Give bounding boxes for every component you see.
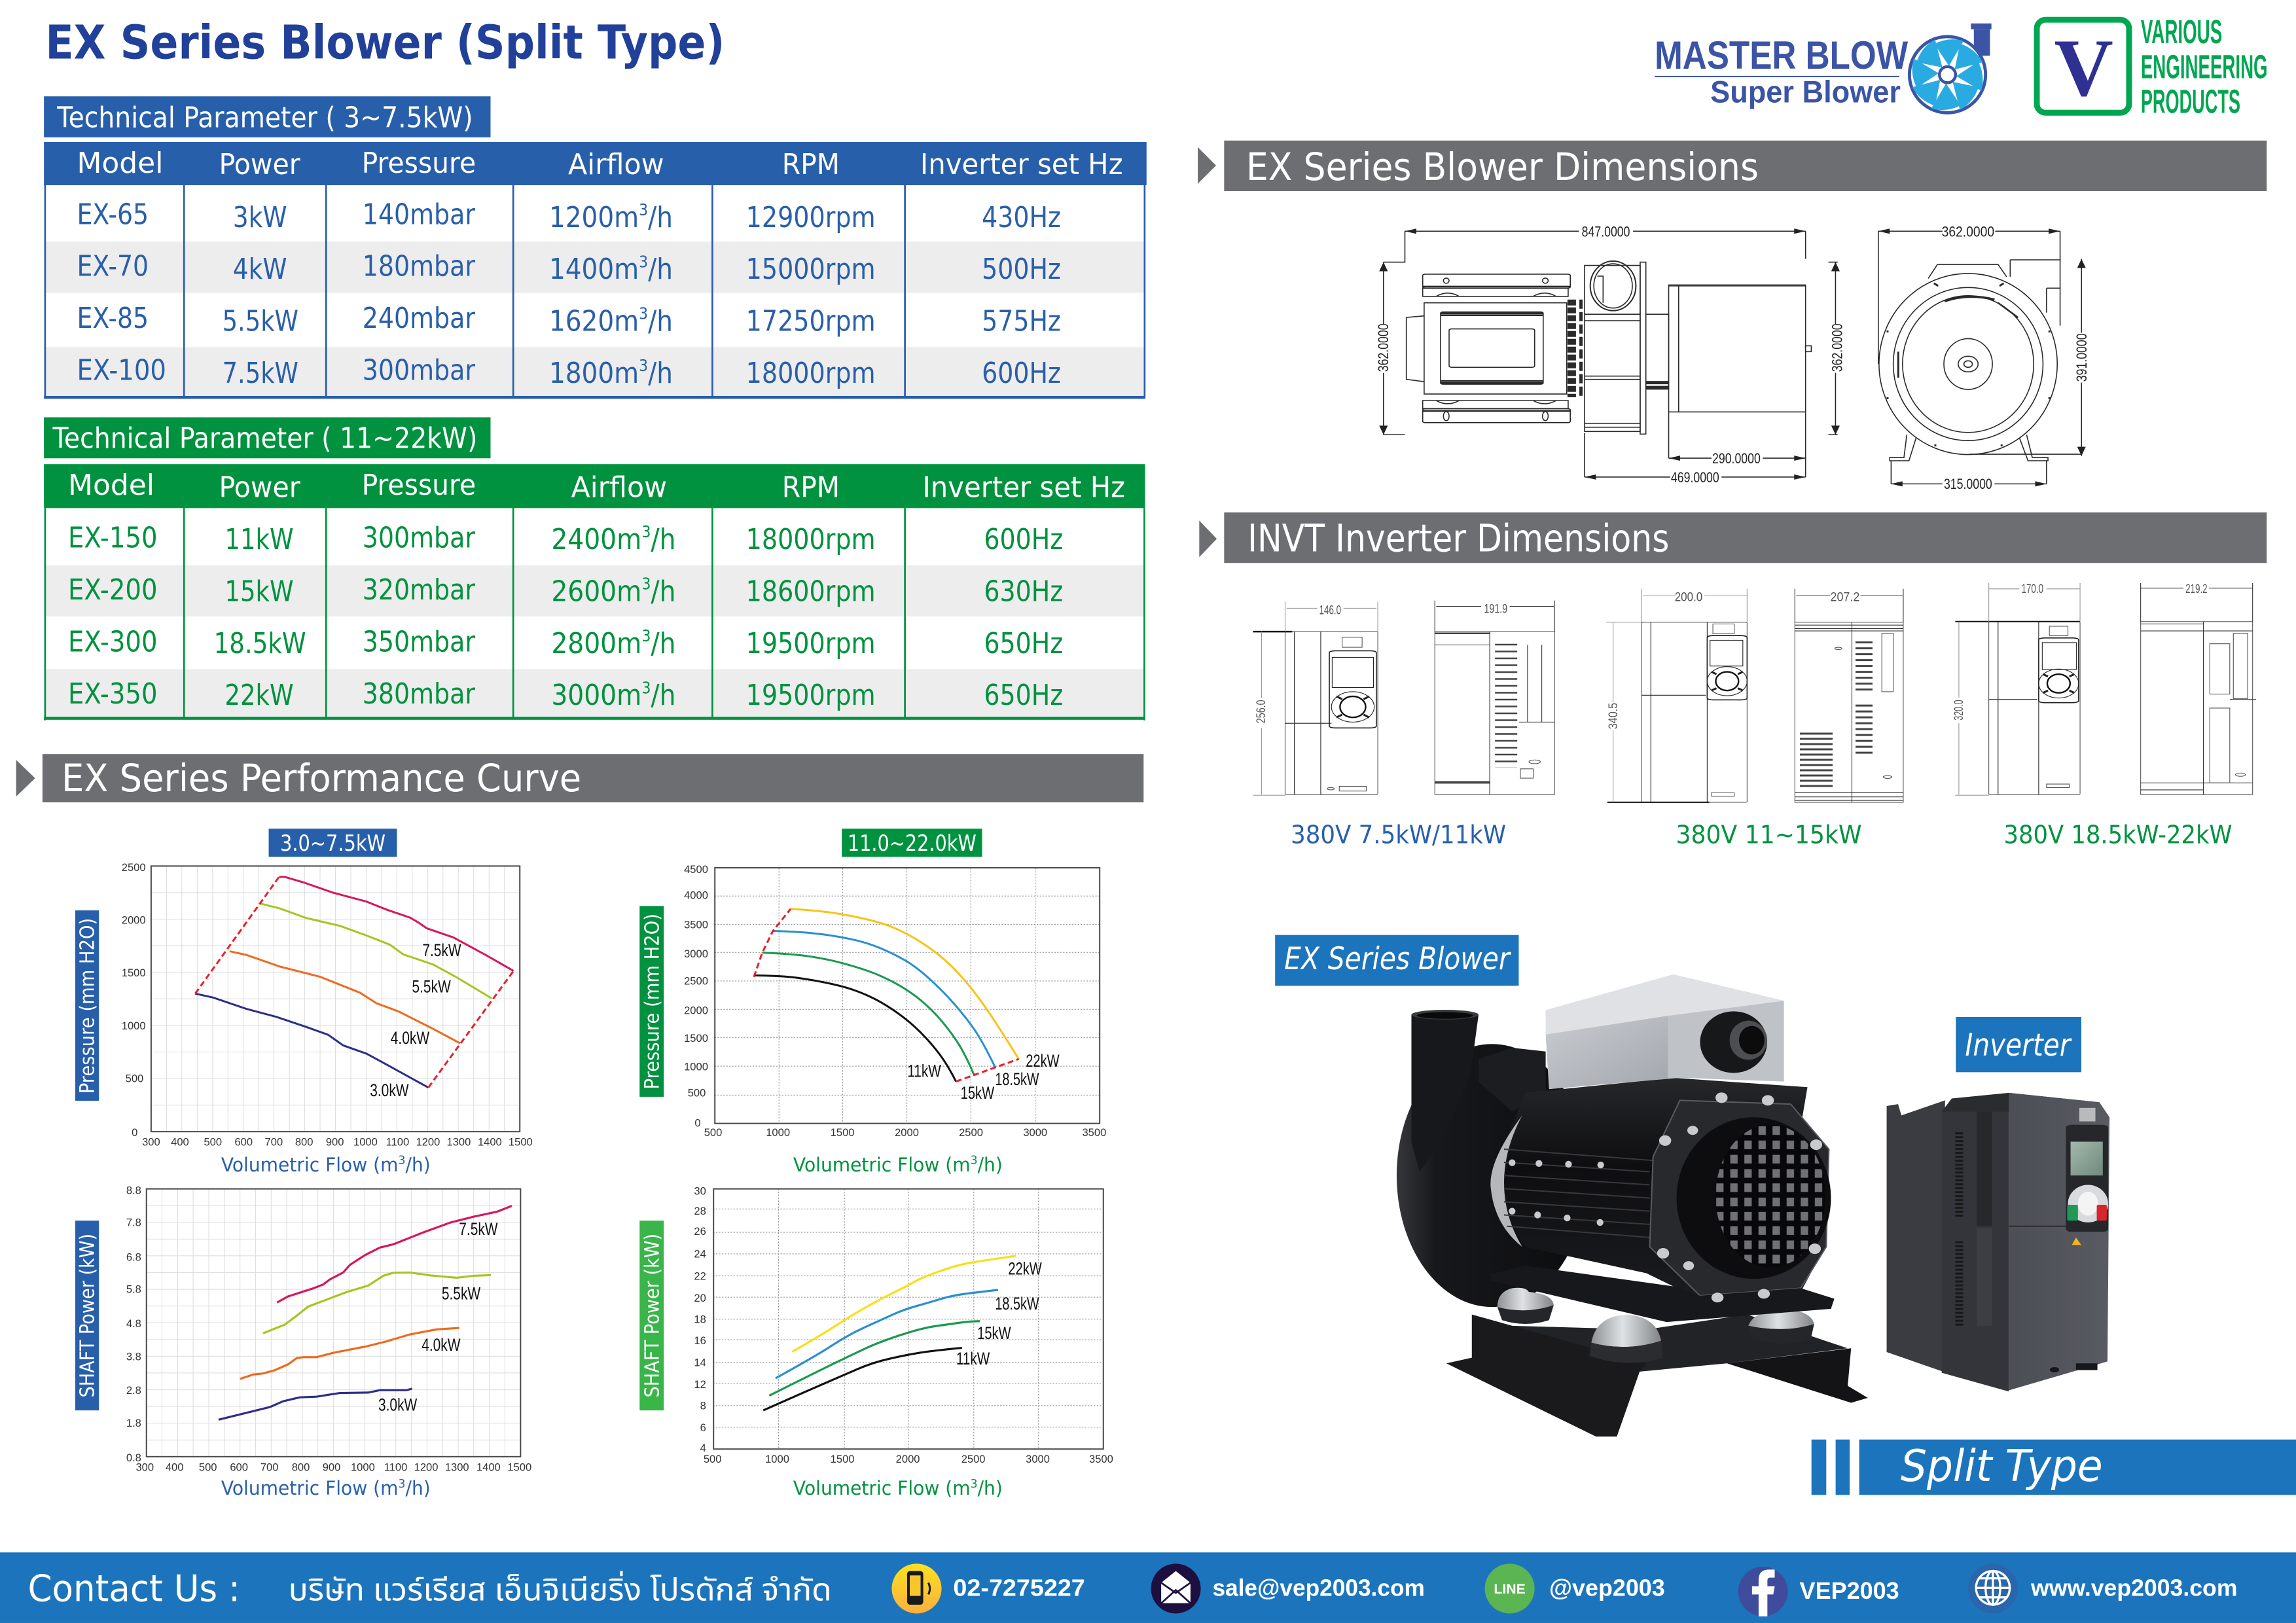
table body rows: 1800m [549, 357, 649, 390]
icon: facebook [1738, 1567, 1788, 1616]
y and x tick labels: 1000 [765, 1453, 789, 1465]
dimension values: 362.0000 [1829, 323, 1845, 372]
y and x tick labels: 700 [260, 1461, 278, 1473]
y and x tick labels: 2.8 [126, 1384, 141, 1397]
y and x tick labels: 1000 [353, 1136, 378, 1149]
y and x tick labels: 2500 [959, 1126, 983, 1139]
curve labels: 18.5kW [995, 1069, 1039, 1089]
chart: pressure curve 11-22kW: Volumetric Flow (m [793, 1154, 977, 1176]
y and x tick labels: 3.8 [126, 1350, 141, 1363]
table body rows: 3 [641, 522, 651, 541]
y and x tick labels: 0.8 [126, 1452, 141, 1464]
inverter dimension values: 207.2 [1831, 590, 1859, 604]
curve labels: 15kW [977, 1323, 1011, 1343]
y and x tick labels: 600 [234, 1136, 253, 1149]
diagram: blower dimension drawing [1375, 223, 2090, 492]
y and x tick labels: 2000 [896, 1453, 920, 1465]
y and x tick labels: 7.8 [126, 1217, 141, 1229]
table body rows: 500Hz [982, 253, 1061, 286]
table header row [77, 147, 1123, 181]
table body rows: 18000rpm [746, 524, 876, 556]
chart: pressure curve 3.0-7.5kW: 3 [399, 1154, 406, 1168]
dimension values [1375, 223, 2090, 492]
unit 1 side [1435, 601, 1554, 794]
dimension values: 290.0000 [1712, 450, 1761, 467]
tag: Inverter [1956, 1017, 2081, 1072]
unit 3 front [1955, 583, 2080, 795]
table body rows: 300mbar [363, 522, 475, 555]
chart: pressure curve 3.0-7.5kW: Volumetric Flow (m [221, 1154, 404, 1176]
inverter dimension values: 191.9 [1484, 601, 1507, 616]
table body rows: 18.5kW [214, 628, 306, 660]
y and x tick labels: 1200 [416, 1136, 440, 1149]
table body rows: 600Hz [982, 357, 1061, 390]
table body rows: 320mbar [363, 574, 475, 607]
y and x tick labels: 500 [204, 1136, 222, 1149]
logo: Various Engineering Products: V [2054, 22, 2113, 113]
curve labels [907, 1051, 1060, 1103]
inverter dimension values: 340.5 [1606, 703, 1621, 729]
table body rows: 3000m [551, 679, 652, 712]
table body rows: 22kW [224, 679, 294, 712]
inverter dimension values: 219.2 [2185, 582, 2208, 596]
curve labels: 4.0kW [391, 1028, 430, 1048]
icon: email [1151, 1563, 1201, 1613]
title: EX Series Blower (Split Type) [45, 15, 725, 69]
curve labels: 18.5kW [995, 1294, 1039, 1313]
table body rows: EX-85 [77, 302, 149, 335]
chart: shaft power 11-22kW: SHAFT Power (kW) [641, 1234, 664, 1397]
table body rows: 5.5kW [223, 306, 298, 338]
y and x tick labels: 500 [704, 1126, 722, 1139]
heading: inverter dimensions section bar: INVT Inverter Dimensions [1247, 516, 1669, 560]
table body rows: /h [651, 628, 675, 660]
dimension values: 469.0000 [1671, 469, 1719, 486]
y and x tick labels: 1400 [476, 1461, 501, 1473]
y and x tick labels: 1500 [509, 1136, 533, 1149]
y and x tick labels: 4500 [684, 863, 708, 876]
y and x tick labels: 14 [694, 1356, 706, 1368]
y and x tick labels [122, 861, 533, 1149]
table body rows: 3kW [233, 202, 287, 234]
table body rows: 11kW [224, 524, 294, 556]
table header row: RPM [782, 149, 840, 181]
table body rows: 3 [641, 678, 651, 697]
y and x tick labels: 2000 [122, 914, 146, 927]
y and x tick labels: 16 [694, 1334, 706, 1347]
y and x tick labels: 3000 [1023, 1126, 1047, 1139]
footer: contact bar: @vep2003 [1549, 1575, 1665, 1601]
chart: pressure curve 3.0-7.5kW: Pressure (mm H2O) [77, 918, 99, 1094]
logo: Various Engineering Products [2037, 12, 2268, 120]
table body rows: EX-150 [68, 522, 158, 555]
inverter dimension values: 170.0 [2022, 582, 2043, 596]
table body rows: 1200m [549, 202, 649, 234]
icon: LINE [1485, 1563, 1535, 1613]
chart: shaft power 3.0-7.5kW: 3 [399, 1477, 406, 1491]
y and x tick labels: 2500 [684, 975, 708, 988]
footer: contact bar: www.vep2003.com [2030, 1575, 2238, 1601]
y and x tick labels: 1000 [766, 1126, 790, 1139]
y and x tick labels: 900 [323, 1461, 340, 1473]
y and x tick labels: 3500 [1089, 1453, 1113, 1465]
y and x tick labels: 600 [230, 1461, 248, 1473]
table header row: Power [219, 149, 300, 181]
heading: technical parameter 3-7.5kW: Technical Parameter ( 3~7.5kW) [56, 102, 473, 135]
label: inverter 11-15kW: 380V 11~15kW [1676, 821, 1862, 849]
table body rows: 19500rpm [746, 679, 876, 712]
curve labels: 15kW [961, 1083, 995, 1103]
y and x tick labels: 1000 [684, 1060, 708, 1073]
logo: Master Blow: Super Blower [1710, 75, 1901, 109]
y and x tick labels: 1500 [831, 1126, 854, 1139]
chart: shaft power 3.0-7.5kW: SHAFT Power (kW) [77, 1234, 99, 1397]
table body rows: EX-70 [77, 251, 149, 283]
table body rows: 650Hz [984, 679, 1063, 712]
product image: EX series blower [1397, 974, 1868, 1436]
inverter dimension values [1254, 582, 2208, 729]
table header row: Inverter set Hz [920, 149, 1123, 181]
table header row: Pressure [362, 147, 476, 180]
chart: pressure curve 11-22kW: /h) [978, 1154, 1003, 1176]
table body rows: 650Hz [984, 628, 1063, 660]
curve labels: 22kW [1026, 1051, 1060, 1071]
table body rows: 4kW [233, 253, 287, 286]
icon: globe [1968, 1563, 2018, 1613]
table body rows: EX-350 [68, 678, 158, 711]
table body rows: 180mbar [363, 251, 475, 283]
curves [763, 1256, 1016, 1410]
y and x tick labels [126, 1184, 531, 1473]
chart: shaft power 11-22kW [639, 1185, 1113, 1499]
table header row: Airflow [571, 472, 667, 505]
table header row: Pressure [362, 469, 476, 502]
y and x tick labels: 1100 [386, 1136, 409, 1149]
y and x tick labels: 8 [700, 1399, 706, 1412]
y and x tick labels: 500 [126, 1072, 143, 1084]
y and x tick labels: 3500 [684, 918, 708, 931]
table body rows: /h [651, 575, 675, 608]
table body rows: 600Hz [984, 524, 1063, 556]
icon: fan wheel [1909, 24, 1992, 113]
curve labels: 5.5kW [442, 1284, 481, 1304]
curve labels [378, 1219, 498, 1415]
y and x tick labels: 1400 [478, 1136, 502, 1149]
chart: shaft power 3.0-7.5kW: Volumetric Flow (m [221, 1477, 404, 1499]
curve labels [956, 1259, 1042, 1368]
table body rows: 430Hz [982, 202, 1061, 234]
y and x tick labels: 1000 [122, 1020, 146, 1032]
curve labels: 5.5kW [412, 976, 451, 996]
table body rows: 1620m [549, 306, 649, 338]
y and x tick labels: 24 [694, 1247, 706, 1260]
table body rows: 2600m [551, 575, 652, 608]
tag: EX Series Blower [1275, 935, 1518, 986]
product image: inverter [1887, 1093, 2109, 1391]
tag: Inverter: Inverter [1965, 1027, 2072, 1063]
icon: phone [891, 1563, 942, 1613]
y and x tick labels: 5.8 [126, 1283, 141, 1295]
curve labels: 11kW [956, 1349, 990, 1368]
footer: contact bar: 02-7275227 [953, 1575, 1085, 1601]
y and x tick labels: 2500 [961, 1453, 986, 1465]
y and x tick labels: 1500 [684, 1032, 708, 1044]
y and x tick labels: 3000 [1026, 1453, 1050, 1465]
unit 2 side [1795, 589, 1903, 802]
table: 11-22kW parameters [44, 464, 1145, 721]
y and x tick labels: 6.8 [126, 1251, 141, 1263]
table body rows: 12900rpm [746, 202, 876, 234]
table header row: RPM [782, 472, 840, 505]
y and x tick labels: 0 [694, 1117, 701, 1130]
table body rows: EX-100 [77, 355, 166, 387]
y and x tick labels: 2500 [122, 861, 146, 874]
chart: pressure curve 3.0-7.5kW [75, 829, 533, 1176]
table body rows: EX-65 [77, 198, 149, 231]
y and x tick labels [694, 1185, 1113, 1465]
y and x tick labels: 300 [142, 1136, 160, 1149]
table body rows: /h [648, 202, 673, 234]
footer: contact bar: บริษัท แวร์เรียส เอ็นจิเนียริ่ง โปรดักส์ จำกัด [289, 1568, 832, 1614]
y and x tick labels: 28 [694, 1205, 706, 1217]
curve labels: 3.0kW [370, 1080, 409, 1100]
y and x tick labels: 6 [700, 1421, 706, 1434]
label: inverter 7.5/11kW: 380V 7.5kW/11kW [1291, 821, 1506, 849]
dimension values: 362.0000 [1942, 223, 1994, 240]
chart: pressure curve 11-22kW [639, 829, 1106, 1176]
table body rows: 240mbar [363, 302, 475, 335]
table body rows: /h [648, 357, 673, 390]
table body rows: /h [648, 306, 673, 338]
y and x tick labels: 400 [166, 1461, 183, 1473]
table body rows: 300mbar [363, 355, 475, 387]
table body rows: EX-300 [68, 626, 158, 659]
dimension values: 362.0000 [1375, 323, 1391, 372]
table body rows: 3 [641, 574, 651, 593]
heading: blower dimensions section bar: EX Series Blower Dimensions [1246, 145, 1759, 189]
table body rows: 3 [639, 304, 648, 323]
table body rows: 15000rpm [746, 253, 876, 286]
icon: LINE: LINE [1494, 1581, 1526, 1597]
footer: contact bar: Contact Us : [28, 1567, 240, 1610]
chart: pressure curve 11-22kW: 11.0~22.0kW [848, 830, 977, 856]
y and x tick labels: 300 [135, 1461, 154, 1473]
y and x tick labels: 3500 [1082, 1126, 1106, 1139]
inverter dimension values: 256.0 [1254, 700, 1268, 723]
chart: shaft power 3.0-7.5kW: /h) [406, 1477, 431, 1499]
logo: Master Blow: MASTER BLOW [1655, 33, 1908, 77]
y and x tick labels: 20 [694, 1292, 706, 1304]
footer: contact bar: VEP2003 [1800, 1578, 1899, 1604]
table body rows: 140mbar [363, 198, 475, 231]
y and x tick labels: 1300 [445, 1461, 469, 1473]
y and x tick labels: 30 [694, 1185, 706, 1198]
y and x tick labels: 1000 [351, 1461, 375, 1473]
diagram: inverter dimension drawings [1253, 582, 2256, 802]
y and x tick labels: 1500 [507, 1461, 531, 1473]
table body rows: 630Hz [984, 575, 1063, 608]
curve labels: 7.5kW [459, 1219, 498, 1239]
banner: Split Type [1812, 1440, 2296, 1495]
heading: performance curve section bar: EX Series Performance Curve [62, 756, 581, 800]
table body rows: /h [648, 253, 673, 286]
y and x tick labels: 4000 [684, 889, 708, 902]
y and x tick labels: 1500 [122, 967, 146, 979]
chart: shaft power 11-22kW: /h) [978, 1477, 1003, 1499]
unit 1 front [1253, 601, 1378, 795]
y and x tick labels: 12 [694, 1378, 706, 1391]
heading: technical parameter 11-22kW: Technical Parameter ( 11~22kW) [52, 423, 477, 455]
dimension values: 315.0000 [1944, 476, 1992, 492]
y and x tick labels: 1100 [384, 1461, 407, 1473]
table body rows: /h [651, 524, 675, 556]
y and x tick labels: 700 [265, 1136, 283, 1149]
heading: blower dimensions section bar [1198, 141, 2267, 191]
y and x tick labels: 1300 [447, 1136, 471, 1149]
y and x tick labels: 18 [694, 1313, 706, 1325]
table body rows: 3 [639, 252, 648, 271]
y and x tick labels: 1.8 [126, 1417, 141, 1429]
table body rows: 575Hz [982, 306, 1061, 338]
inverter dimension values: 200.0 [1675, 590, 1702, 604]
chart: pressure curve 11-22kW: Pressure (mm H2O) [641, 914, 664, 1090]
chart: shaft power 11-22kW: 3 [971, 1477, 978, 1491]
curve labels: 4.0kW [422, 1335, 461, 1355]
y and x tick labels: 1500 [831, 1453, 854, 1465]
table body rows: 18000rpm [746, 357, 876, 390]
curve labels: 7.5kW [422, 940, 461, 960]
y and x tick labels: 4.8 [126, 1317, 141, 1330]
table body rows: 2800m [551, 628, 652, 660]
table body rows: 15kW [224, 575, 294, 608]
curves [195, 877, 514, 1088]
table header row: Model [68, 469, 154, 502]
footer: contact bar [0, 1552, 2296, 1623]
y and x tick labels: 500 [199, 1461, 217, 1473]
curve labels: 3.0kW [378, 1395, 418, 1415]
y and x tick labels: 2000 [895, 1126, 919, 1139]
table header row [68, 469, 1125, 505]
dimension values: 847.0000 [1582, 223, 1630, 240]
table body rows: 1400m [549, 253, 649, 286]
heading: performance curve section bar [16, 754, 1143, 802]
table body rows: 2400m [551, 524, 652, 556]
y and x tick labels: 500 [688, 1087, 706, 1099]
table body rows: 19500rpm [746, 628, 876, 660]
table body rows [68, 522, 1063, 712]
table header row: Airflow [568, 149, 664, 181]
table body rows [77, 198, 1061, 390]
inverter dimension values: 146.0 [1319, 603, 1341, 618]
y and x tick labels: 2000 [684, 1004, 708, 1016]
y and x tick labels: 4 [700, 1442, 706, 1454]
footer: contact bar: sale@vep2003.com [1212, 1575, 1425, 1601]
heading: inverter dimensions section bar [1199, 512, 2267, 563]
table header row: Power [219, 472, 300, 505]
banner: Split Type: Split Type [1901, 1440, 2103, 1491]
logo: Master Blow [1655, 24, 1992, 113]
chart: pressure curve 3.0-7.5kW: /h) [406, 1154, 431, 1176]
unit 2 front [1606, 589, 1747, 802]
table body rows: 3 [639, 200, 648, 219]
y and x tick labels: 1200 [414, 1461, 438, 1473]
y and x tick labels: 800 [292, 1461, 310, 1473]
dimension values: 391.0000 [2073, 333, 2090, 382]
table body rows: 7.5kW [223, 357, 298, 390]
table body rows: /h [651, 679, 675, 712]
curve labels [370, 940, 461, 1100]
y and x tick labels [684, 863, 1106, 1139]
curves [219, 1206, 512, 1419]
table body rows: 18600rpm [746, 575, 876, 608]
y and x tick labels: 900 [326, 1136, 344, 1149]
curve labels: 11kW [907, 1061, 941, 1081]
curve labels: 22kW [1008, 1259, 1042, 1279]
y and x tick labels: 8.8 [126, 1184, 141, 1196]
curves [754, 909, 1019, 1082]
unit 3 side [2141, 583, 2256, 794]
table: 3-7.5kW parameters [44, 142, 1147, 399]
inverter dimension values: 320.0 [1952, 700, 1966, 721]
chart: pressure curve 11-22kW: 3 [971, 1154, 978, 1168]
y and x tick labels: 0 [132, 1126, 137, 1139]
chart: shaft power 3.0-7.5kW [75, 1184, 531, 1499]
table body rows: 3 [639, 356, 648, 375]
table header row: Inverter set Hz [922, 472, 1125, 505]
table body rows: 17250rpm [746, 306, 876, 338]
table body rows: EX-200 [68, 574, 158, 607]
y and x tick labels: 500 [704, 1453, 721, 1465]
label: inverter 18.5-22kW: 380V 18.5kW-22kW [2003, 821, 2232, 849]
y and x tick labels: 22 [694, 1270, 706, 1282]
table body rows: 380mbar [363, 678, 475, 711]
y and x tick labels: 800 [295, 1136, 313, 1149]
y and x tick labels: 400 [171, 1136, 189, 1149]
table body rows: 350mbar [363, 626, 475, 659]
chart: pressure curve 3.0-7.5kW: 3.0~7.5kW [280, 830, 386, 856]
logo: Various Engineering Products: VARIOUS [2141, 12, 2222, 50]
tag: EX Series Blower: EX Series Blower [1284, 941, 1511, 977]
y and x tick labels: 3000 [684, 948, 708, 960]
table header row: Model [77, 147, 163, 180]
chart: shaft power 11-22kW: Volumetric Flow (m [793, 1477, 977, 1499]
table body rows: 3 [641, 626, 651, 645]
y and x tick labels: 26 [694, 1225, 706, 1238]
